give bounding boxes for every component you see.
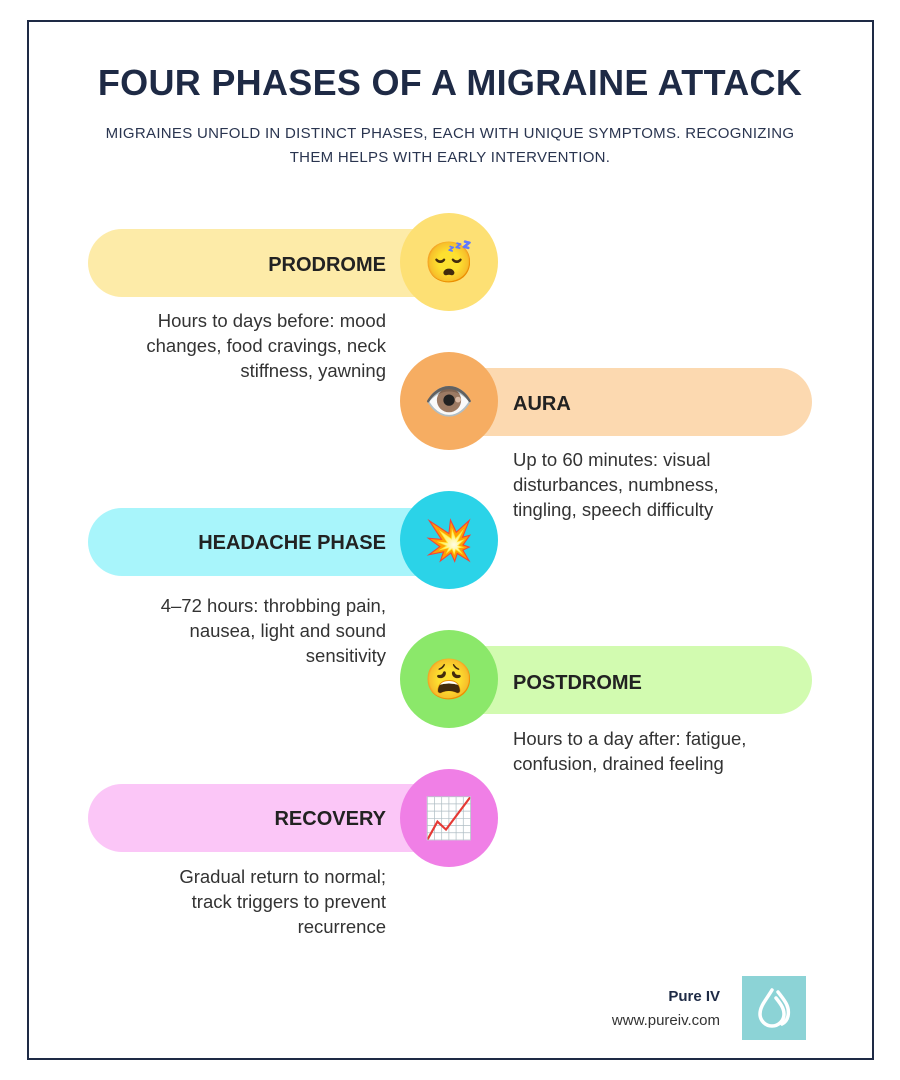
brand text xyxy=(612,988,720,1029)
bar: recovery xyxy=(88,784,468,852)
desc: aura: Up to 60 minutes: visual xyxy=(513,449,710,470)
bar: headache xyxy=(88,508,468,576)
label: recovery: RECOVERY xyxy=(274,808,386,830)
phase: recovery xyxy=(88,769,498,937)
icon: weary face: 😩 xyxy=(424,656,474,702)
subtitle: MIGRAINES UNFOLD IN DISTINCT PHASES, EACH WITH UNIQUE SYMPTOMS. RECOGNIZING THEM HELPS WITH EARLY INTERVENTION. xyxy=(106,125,794,166)
label: postdrome: POSTDROME xyxy=(513,672,642,694)
icon: eye: 👁️ xyxy=(424,378,474,424)
label: prodrome: PRODROME xyxy=(268,254,386,276)
desc: aura: tingling, speech difficulty xyxy=(513,499,713,520)
brand text: www.pureiv.com xyxy=(612,1012,720,1029)
desc: aura: disturbances, numbness, xyxy=(513,474,719,495)
phase: postdrome xyxy=(400,630,812,774)
bar: prodrome xyxy=(88,229,468,297)
label: aura: AURA xyxy=(513,393,571,415)
desc: prodrome xyxy=(146,310,386,381)
desc: prodrome: stiffness, yawning xyxy=(240,360,386,381)
desc: aura xyxy=(513,449,719,520)
desc: headache xyxy=(161,595,386,666)
desc: postdrome xyxy=(513,728,746,774)
title: FOUR PHASES OF A MIGRAINE ATTACK xyxy=(98,62,802,103)
icon: chart xyxy=(400,769,498,867)
label: headache: HEADACHE PHASE xyxy=(198,532,386,554)
desc: headache: sensitivity xyxy=(306,645,386,666)
desc: postdrome: confusion, drained feeling xyxy=(513,753,724,774)
desc: prodrome: changes, food cravings, neck xyxy=(146,335,386,356)
bar: postdrome xyxy=(450,646,812,714)
desc: recovery: Gradual return to normal; xyxy=(179,866,386,887)
icon: weary face xyxy=(400,630,498,728)
desc: recovery xyxy=(179,866,386,937)
icon: chart: 📈 xyxy=(424,794,474,842)
icon: collision: 💥 xyxy=(424,516,474,564)
icon: eye xyxy=(400,352,498,450)
phase: headache xyxy=(88,491,498,666)
desc: recovery: track triggers to prevent xyxy=(192,891,386,912)
desc: headache: 4–72 hours: throbbing pain, xyxy=(161,595,386,616)
phase: prodrome xyxy=(88,213,498,381)
phase: aura xyxy=(400,352,812,520)
desc: recovery: recurrence xyxy=(298,916,386,937)
desc: prodrome: Hours to days before: mood xyxy=(158,310,386,331)
icon: sleeping face xyxy=(400,213,498,311)
icon: sleeping face: 😴 xyxy=(424,238,474,286)
logo xyxy=(742,976,806,1040)
brand text: Pure IV xyxy=(668,988,720,1005)
bar: aura xyxy=(450,368,812,436)
desc: postdrome: Hours to a day after: fatigue, xyxy=(513,728,746,749)
icon: collision xyxy=(400,491,498,589)
desc: headache: nausea, light and sound xyxy=(190,620,386,641)
